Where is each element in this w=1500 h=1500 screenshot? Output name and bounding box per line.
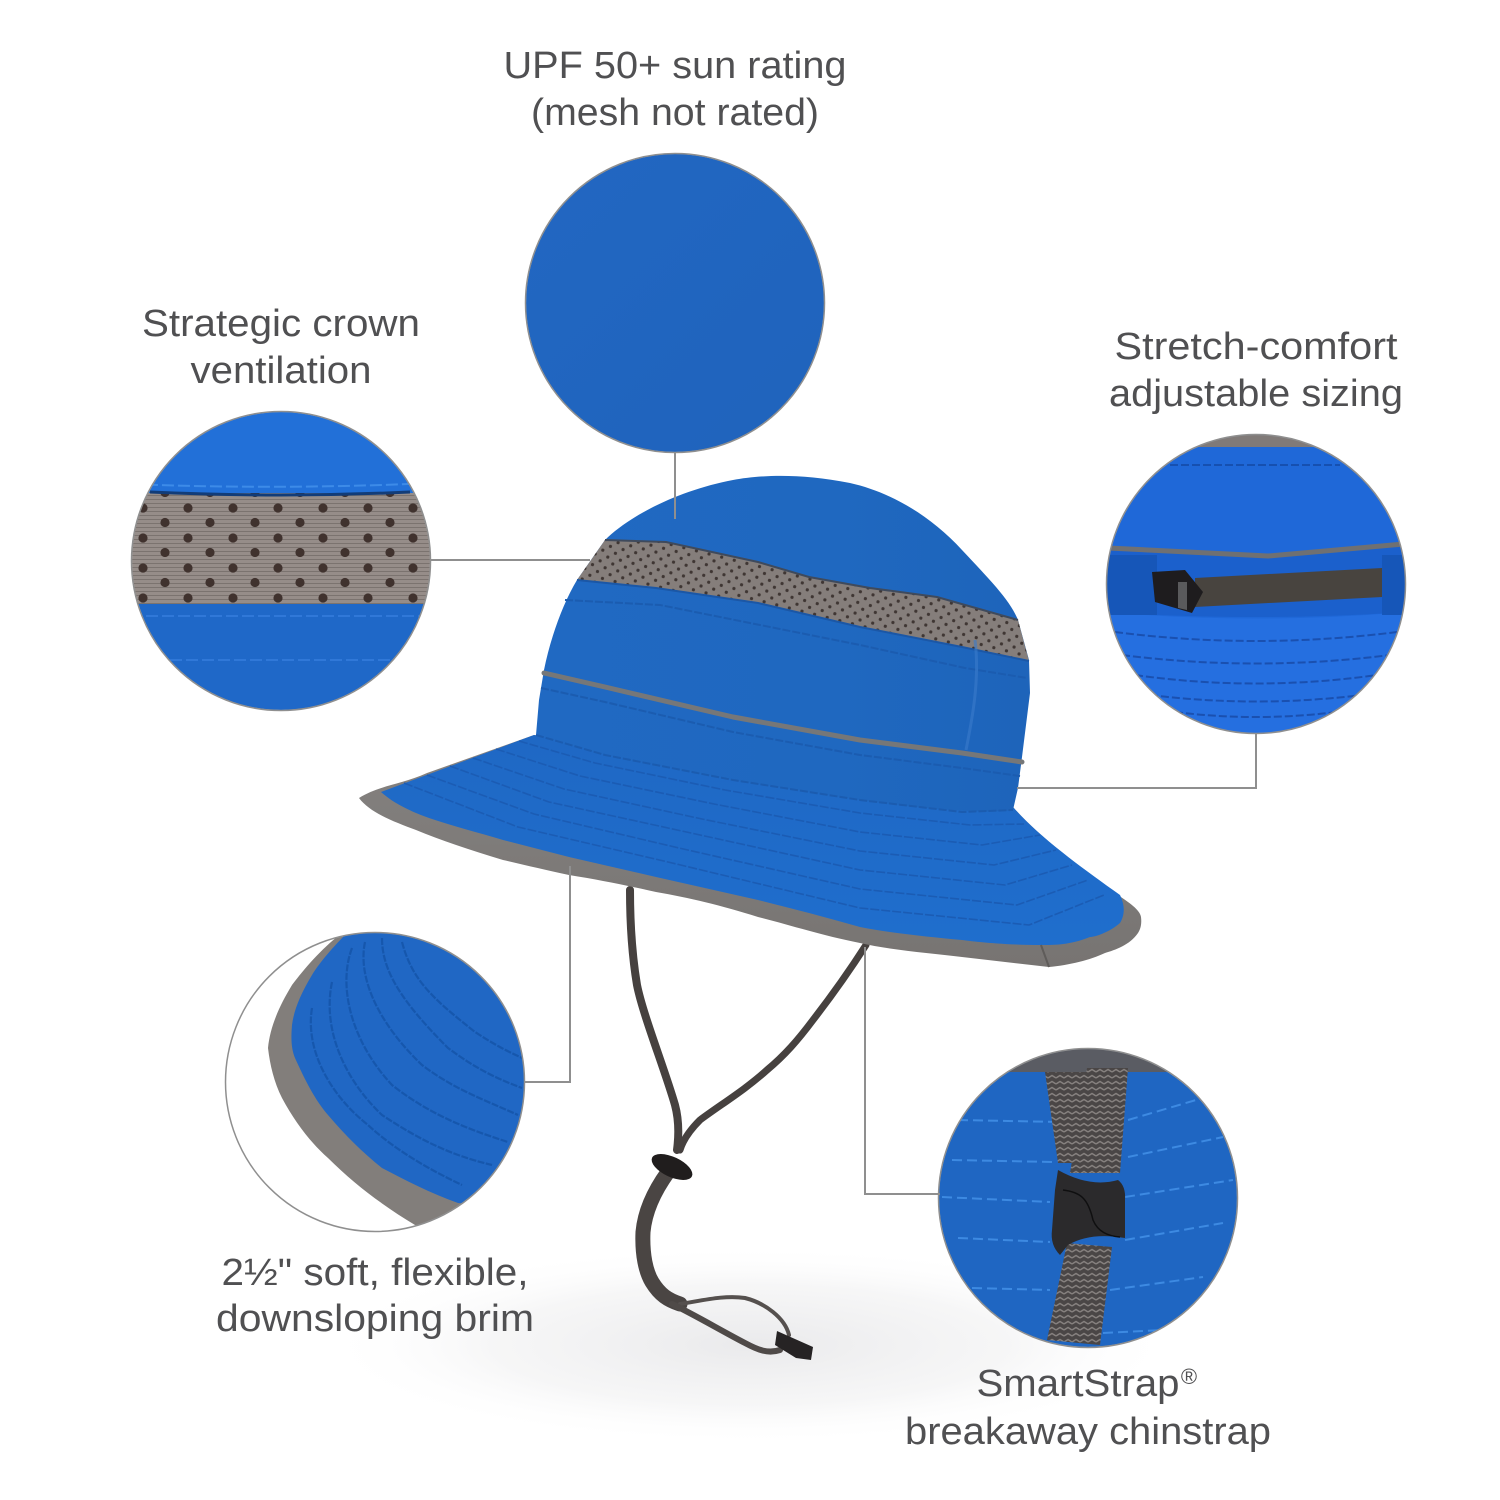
leader line: sun rating [674, 452, 676, 519]
heading: crown ventilation: ventilation [190, 350, 372, 392]
under-piping stitch [541, 688, 1020, 776]
heading: brim [216, 1252, 534, 1340]
panel: chinstrap circle [938, 1045, 1240, 1350]
panel: brim circle [226, 932, 530, 1232]
binding seam [1041, 945, 1049, 967]
illustration: bucket hat [359, 476, 1141, 1360]
heading: chinstrap [905, 1363, 1271, 1453]
mesh band [577, 540, 1029, 661]
heading: adjustable sizing [1109, 326, 1403, 415]
crown piping [544, 673, 1022, 762]
panel: fabric circle [526, 154, 824, 452]
heading: chinstrap: breakaway chinstrap [905, 1411, 1271, 1453]
mesh top edge [605, 540, 1018, 620]
panel: adjustable sizing circle [1105, 434, 1407, 735]
heading: UPF sun rating: UPF 50+ sun rating [504, 45, 846, 87]
brim binding [359, 735, 1141, 967]
brim stitching [404, 741, 1104, 925]
cord tip [775, 1331, 813, 1360]
crown [536, 476, 1030, 811]
crown vertical seam [966, 640, 977, 750]
heading: brim: downsloping brim [216, 1298, 534, 1340]
panel: ventilation mesh circle [130, 410, 432, 714]
heading: chinstrap: ® [1181, 1364, 1197, 1389]
crown stitching and seam [536, 600, 1027, 812]
heading: UPF sun rating [504, 45, 846, 134]
heading: UPF sun rating: (mesh not rated) [531, 92, 819, 134]
brim [381, 735, 1124, 945]
heading: crown ventilation [142, 303, 420, 392]
chin cord [630, 890, 866, 1352]
ground shadow [320, 1245, 1180, 1445]
mesh perforation [577, 540, 1029, 661]
cord toggle [648, 1149, 696, 1185]
leader line: adjustable sizing [1017, 733, 1256, 788]
mesh bottom edge [577, 580, 1029, 661]
heading: chinstrap: SmartStrap [976, 1363, 1180, 1405]
heading: adjustable sizing: Stretch-comfort [1114, 326, 1398, 368]
leader line: chinstrap [865, 947, 940, 1194]
leader line: brim [524, 866, 570, 1082]
heading: crown ventilation: Strategic crown [142, 303, 420, 345]
heading: brim: 2½" soft, flexible, [222, 1252, 528, 1294]
heading: adjustable sizing: adjustable sizing [1109, 373, 1403, 415]
leader line: crown ventilation [430, 559, 590, 561]
